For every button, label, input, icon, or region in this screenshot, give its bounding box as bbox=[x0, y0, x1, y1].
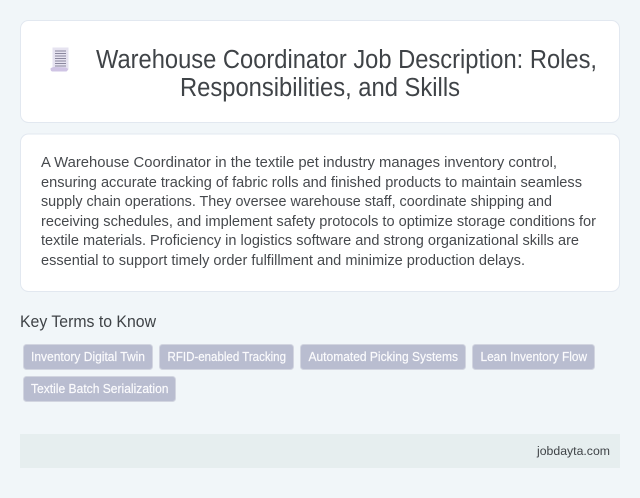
chip: Textile Batch Serialization: Textile Batch Serialization bbox=[31, 381, 168, 396]
chip: Automated Picking Systems bbox=[300, 344, 466, 370]
description text: receiving schedules, and implement safety protocols to optimize storage conditions for bbox=[41, 214, 596, 230]
title: Responsibilities, and Skills bbox=[180, 74, 460, 102]
footer source text: jobdayta.com bbox=[536, 444, 610, 458]
description text: A Warehouse Coordinator in the textile pet industry manages inventory control, bbox=[41, 155, 557, 171]
chip: RFID-enabled Tracking: RFID-enabled Tracking bbox=[168, 349, 286, 364]
chip: Inventory Digital Twin bbox=[24, 344, 152, 370]
chip: Textile Batch Serialization bbox=[24, 376, 176, 402]
chip: RFID-enabled Tracking bbox=[160, 344, 294, 370]
description text: supply chain operations. They oversee warehouse staff, coordinate shipping and bbox=[41, 194, 552, 210]
footer bbox=[20, 434, 620, 468]
heading: key terms: Key Terms to Know bbox=[20, 313, 156, 331]
title bbox=[96, 46, 597, 102]
chip: Inventory Digital Twin: Inventory Digital Twin bbox=[31, 349, 145, 364]
icon: document scroll bbox=[50, 48, 68, 72]
description text: textile materials. Proficiency in logistics software and strong organizational skills are bbox=[41, 233, 579, 249]
title: Warehouse Coordinator Job Description: Roles, bbox=[96, 46, 597, 74]
description text: ensuring accurate tracking of fabric rolls and finished products to maintain seamless bbox=[41, 175, 582, 191]
description text: essential to support timely order fulfillment and minimize production delays. bbox=[41, 253, 525, 269]
chip: Lean Inventory Flow bbox=[472, 344, 594, 370]
chip: Lean Inventory Flow: Lean Inventory Flow bbox=[480, 349, 588, 364]
description text bbox=[41, 155, 596, 269]
panel: description bbox=[20, 134, 620, 292]
key term chips bbox=[24, 344, 594, 402]
chip: Automated Picking Systems: Automated Picking Systems bbox=[308, 349, 458, 364]
panel: title card bbox=[20, 20, 620, 122]
